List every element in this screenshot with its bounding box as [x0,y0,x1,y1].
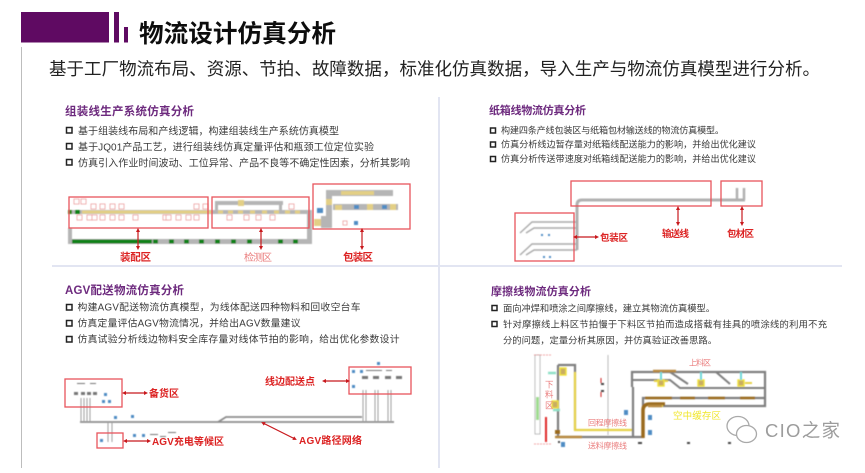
bullet list: panel 2: 仿真分析线边暂存量对纸箱线配送能力的影响，并给出优化建议 [501,139,756,150]
heading: panel 1: 组装线生产系统仿真分析 [65,104,194,118]
zone labels: carton: 包装区 [600,232,628,244]
left margin rule [21,47,22,468]
bullet list: panel 2: 仿真分析传送带速度对纸箱线配送能力的影响，并给出优化建议 [501,153,756,164]
zone labels: friction line: 料 [545,390,554,400]
bullet list: panel 3 [66,301,400,346]
heading: panel 2: 纸箱线物流仿真分析 [489,103,586,117]
zone labels: assembly [120,250,374,264]
panel: 摩擦线物流仿真分析 [491,284,827,450]
callout boxes: assembly zones [69,184,410,229]
arrows: carton zones [575,208,742,237]
zone labels: carton [600,228,754,244]
bullet list: panel 1 [66,124,410,169]
title: 物流设计仿真分析 [139,20,336,48]
bullet list: panel 4: 分的问题，定量分析其原因，并仿真验证改善思路。 [503,334,717,346]
zone labels: assembly: 检测区 [244,251,272,264]
zone labels: AGV: 备货区 [149,387,179,400]
header accent bars [21,12,128,42]
bullet list: panel 1: 仿真引入作业时间波动、工位异常、产品不良等不确定性因素，分析其影响 [78,156,410,169]
zone labels: friction line: 下 [545,380,554,390]
zone labels: carton: 包材区 [727,228,754,240]
zone labels: AGV: 线边配送点 [265,375,315,388]
bullet list: panel 3: 仿真试验分析线边物料安全库存量对线体节拍的影响，给出优化参数设计 [78,333,400,346]
bullet list: panel 2: 构建四条产线包装区与纸箱包材输送线的物流仿真模型。 [501,124,724,136]
zone labels: AGV: AGV充电等候区 [152,435,224,448]
zone labels: friction line: 空中缓存区 [673,410,721,422]
subtitle: 基于工厂物流布局、资源、节拍、故障数据，标准化仿真数据，导入生产与物流仿真模型进行分析。 [49,59,820,79]
heading: panel 3: AGV配送物流仿真分析 [65,283,184,297]
bullet list: panel 1: 基于JQ01产品工艺，进行组装线仿真定量评估和瓶颈工位定位实验 [78,140,374,153]
zone labels: assembly: 装配区 [120,250,152,264]
zone labels: carton: 输送线 [662,228,689,240]
panel: 组装线生产系统仿真分析 [65,104,410,264]
callout boxes: AGV zones [65,367,411,448]
panel: 纸箱线物流仿真分析 [489,103,762,261]
bullet list: panel 2 [490,124,756,164]
heading: panel 4: 摩擦线物流仿真分析 [491,284,591,298]
arrows: assembly zones [138,230,362,248]
arrows: AGV zones [124,381,348,441]
bullet list: panel 4: 针对摩擦线上料区节拍慢于下料区节拍而造成搭载有挂具的喷涂线的利用不充 [503,318,827,330]
icon: chat bubbles [727,416,756,442]
bullet list: panel 4: 面向冲焊和喷涂之间摩擦线，建立其物流仿真模型。 [503,302,715,314]
diagram: carton line layout [520,188,745,258]
zone labels: AGV: AGV路径网络 [299,434,362,447]
zone labels: friction line: 区 [545,400,554,410]
diagram: assembly line layout [68,190,398,244]
bullet list: panel 3: 仿真定量评估AGV物流情况，并给出AGV数量建议 [78,317,301,330]
watermark: CIO之家 [727,416,840,442]
diagram: AGV path network [74,362,402,442]
callout boxes: carton zones [515,181,762,261]
panel dividers [52,97,842,468]
bullet list: panel 1: 基于组装线布局和产线逻辑，构建组装线生产系统仿真模型 [78,124,339,137]
zone labels: friction line: 回程摩擦线 [588,418,627,428]
zone labels: friction line: 送料摩擦线 [588,440,627,450]
zone labels: assembly: 包装区 [343,250,374,264]
diagram: friction line layout [534,355,765,447]
panel: AGV配送物流仿真分析 [65,283,411,448]
zone labels: AGV [149,375,362,448]
watermark text: CIO之家 [765,420,840,441]
bullet list: panel 3: 构建AGV配送物流仿真模型，为线体配送四种物料和回收空台车 [78,301,361,314]
zone labels: friction line: 上料区 [689,358,711,368]
bullet list: panel 4 [492,302,827,346]
zone labels: friction line [545,358,721,450]
